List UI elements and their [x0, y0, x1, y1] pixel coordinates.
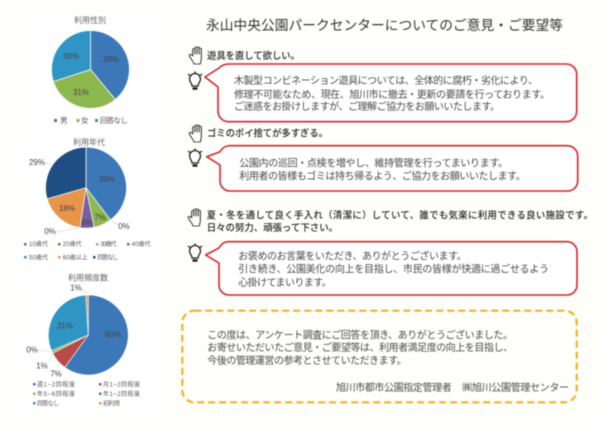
legend: age: 回答なし: [97, 254, 118, 262]
legend: frequency: [33, 380, 140, 408]
closing message text: 今後の管理運営の参考とさせていただきます。: [207, 354, 407, 367]
pie labels: age: 29%: [29, 158, 45, 167]
legend: gender: 男: [60, 116, 68, 125]
icon: hand 1: [189, 47, 201, 64]
opinion text 3: 夏・冬を通して良く手入れ（清潔に）していて、誰でも気楽に利用できる良い施設です。: [207, 210, 593, 220]
icon: hand 2: [189, 125, 201, 142]
reply text 2: [239, 156, 526, 182]
reply text 1: 木製型コンビネーション遊具については、全体的に腐朽・劣化により、: [234, 74, 538, 87]
legend: frequency: 月1~2回程度: [103, 380, 140, 388]
pie labels: gender: [63, 52, 119, 97]
reply text 3: 引き続き、公園美化の向上を目指し、市民の皆様が快適に過ごせるよう: [238, 262, 549, 276]
panel: usage frequency: [18, 270, 160, 410]
opinion text 3: 日々の努力、頑張って下さい。: [207, 222, 338, 233]
pie labels: gender: 31%: [73, 88, 89, 97]
legend: age: 60歳以上: [63, 254, 88, 262]
pie labels: frequency: 60%: [105, 330, 121, 339]
reply text 3: 心掛けてまいります。: [238, 276, 332, 289]
reply text 2: 利用者の皆様もゴミは持ち帰るよう、ご協力をお願いいたします。: [239, 170, 526, 182]
pie labels: age: 0%: [44, 227, 56, 236]
pie chart: gender: [51, 30, 129, 108]
pie labels: age: 0%: [118, 222, 130, 231]
reply text 3: [238, 250, 549, 289]
icon: light bulb 3: [188, 244, 202, 260]
pie chart: frequency: [48, 295, 128, 375]
legend: age: 40歳代: [132, 240, 150, 248]
pie labels: age: 18%: [59, 204, 75, 213]
panel: usage by age: [18, 136, 160, 267]
legend: frequency: 回答なし: [37, 400, 59, 408]
pie chart: age: [46, 147, 127, 228]
closing message box: [182, 311, 577, 402]
chart title: frequency: 利用頻度数: [68, 272, 108, 282]
legend: frequency: 週1~2回程度: [37, 380, 75, 388]
section: opinion 3: [188, 209, 593, 295]
icon: light bulb 2: [188, 148, 202, 166]
chart title: age: 利用年代: [73, 137, 105, 147]
pie labels: frequency: 31%: [57, 322, 73, 330]
pie labels: age: 7%: [94, 213, 106, 222]
icon: hand 3: [188, 209, 200, 226]
pie labels: age: 39%: [99, 175, 115, 184]
closing message text: [207, 328, 513, 367]
chart title: gender: 利用性別: [74, 15, 106, 25]
pie labels: frequency: 7%: [50, 370, 62, 378]
reply text 1: 修理不可能なため、現在、旭川市に撤去・更新の要請を行っております。: [234, 88, 550, 101]
legend: frequency: 年1~2回程度: [103, 390, 140, 398]
closing message text: お寄せいただいたご意見・ご要望等は、利用者満足度の向上を目指し、: [207, 341, 513, 354]
reply bubble 1: [205, 64, 577, 122]
legend: age: 50歳代: [29, 254, 48, 262]
reply text 1: [234, 74, 550, 113]
closing message text: この度は、アンケート調査にご回答を頂き、ありがとうございました。: [207, 328, 513, 342]
leader lines: frequency: [38, 289, 87, 369]
legend: age: 10歳代: [29, 240, 48, 248]
main title: 永山中央公園パークセンターについてのご意見・ご要望等: [206, 17, 563, 33]
reply bubble 3: [206, 242, 577, 295]
reply text 1: ご迷惑をお掛けしますが、ご理解ご協力をお願いいたします。: [234, 100, 500, 113]
pie labels: frequency: [26, 284, 121, 378]
legend: gender: 女: [81, 115, 89, 125]
legend: gender: 回答なし: [100, 115, 128, 125]
pie labels: age: 6%: [81, 218, 93, 227]
panel: usage by gender: [18, 12, 160, 134]
icon: light bulb 1: [188, 72, 202, 88]
legend: age: 20歳代: [63, 240, 82, 248]
opinion text 1: 遊具を直して欲しい。: [207, 50, 300, 61]
legend: age: 30歳代: [100, 240, 116, 248]
legend: gender: [54, 115, 128, 125]
pie labels: frequency: 1%: [36, 362, 48, 370]
section: opinion 1: [188, 47, 577, 122]
signature: ㈱旭川公園管理センター: [462, 381, 569, 394]
pie labels: gender: 30%: [63, 52, 79, 61]
opinion text 2: ゴミのポイ捨てが多すぎる。: [207, 128, 328, 138]
pie labels: frequency: 1%: [70, 284, 82, 292]
signature: 旭川市都市公園指定管理者: [336, 381, 452, 394]
section: opinion 2: [188, 125, 578, 191]
signature: [336, 381, 569, 394]
legend: age: [24, 240, 150, 262]
pie labels: frequency: 0%: [26, 346, 38, 354]
leader lines: age: [45, 163, 119, 232]
reply text 3: お褒めのお言葉をいただき、ありがとうございます。: [238, 250, 467, 262]
reply bubble 2: [207, 146, 578, 191]
opinion text 3: [207, 210, 593, 233]
pie labels: age: [29, 158, 130, 236]
reply text 2: 公園内の巡回・点検を増やし、維持管理を行ってまいります。: [239, 156, 508, 169]
legend: frequency: 初利用: [103, 400, 120, 408]
legend: frequency: 年5~6回程度: [37, 390, 75, 398]
pie labels: gender: 39%: [103, 55, 119, 64]
